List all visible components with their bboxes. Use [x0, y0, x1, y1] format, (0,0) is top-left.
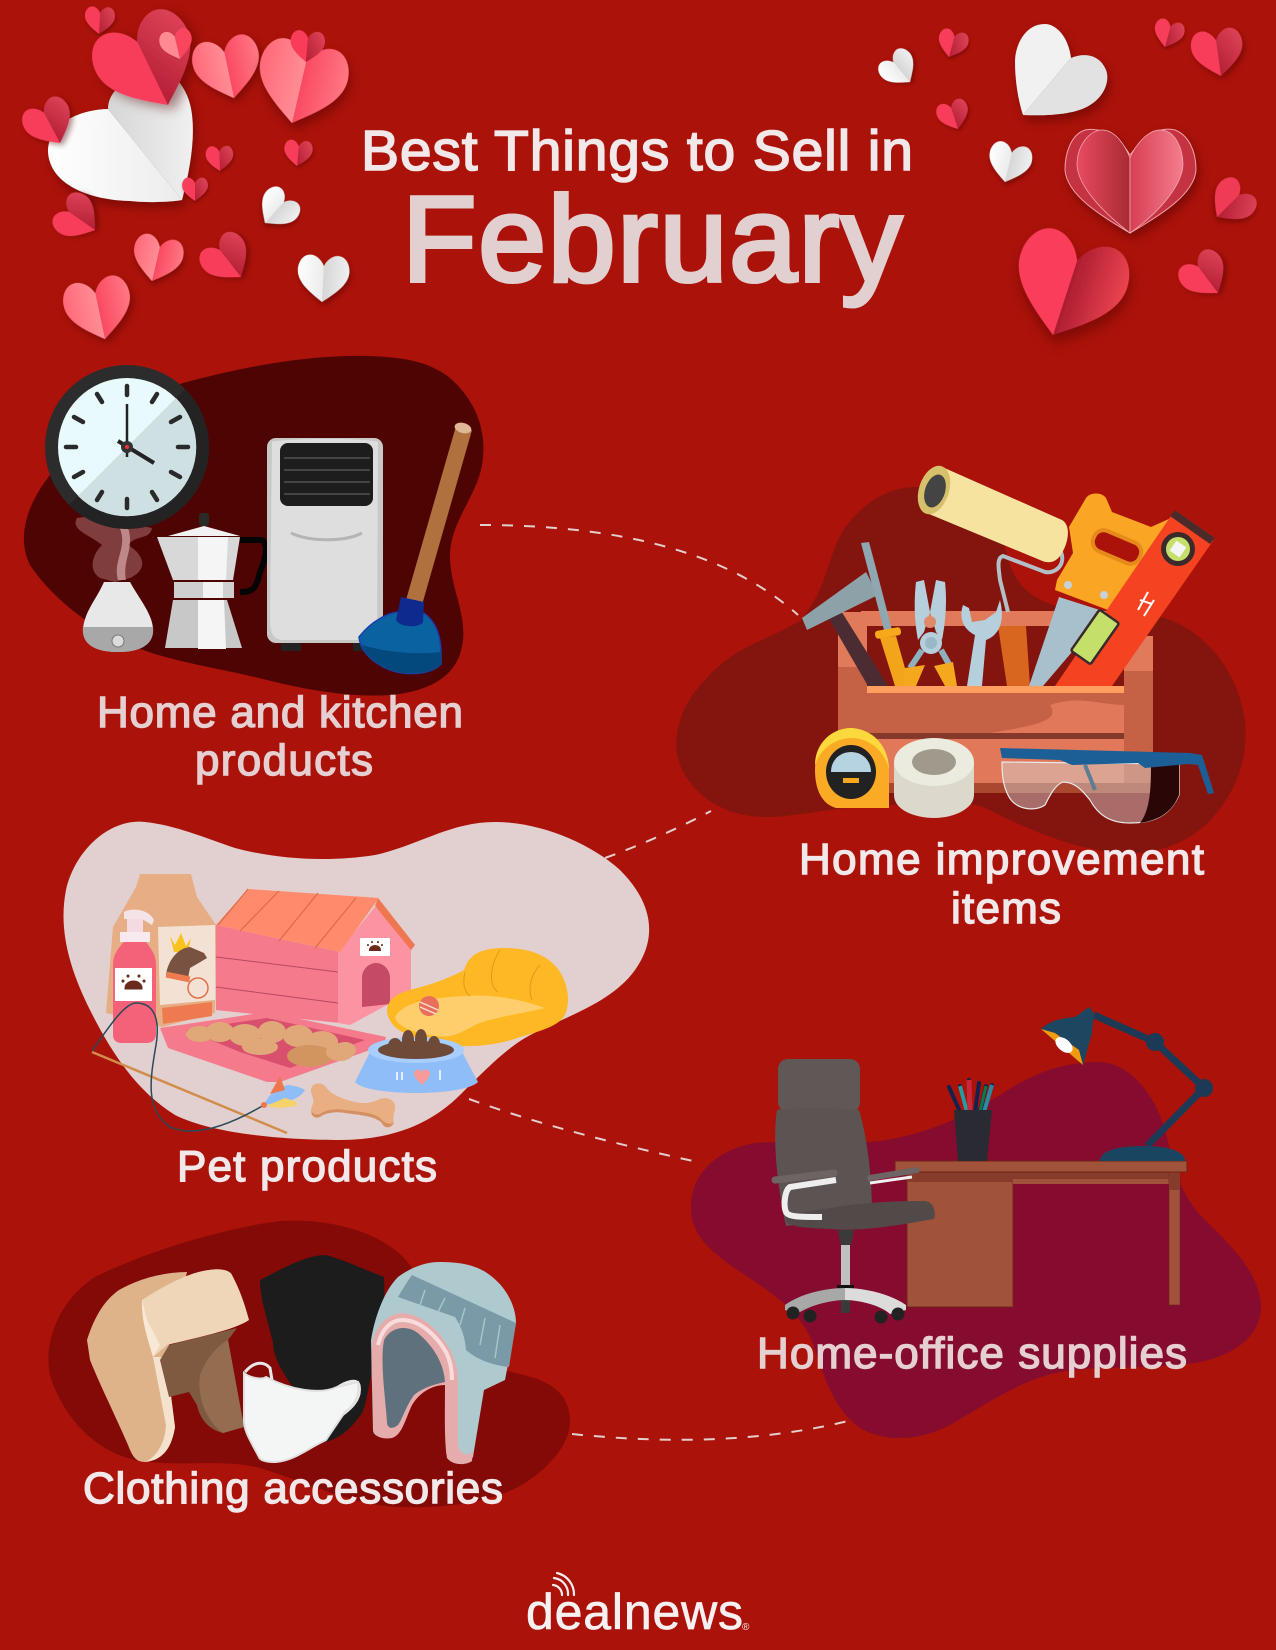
- label: home and kitchen products: products: [195, 736, 373, 785]
- icon: dog food bag: [106, 874, 216, 1027]
- icon: cat wand toy: [92, 1003, 305, 1133]
- wordmark: dealnews: [526, 1584, 743, 1640]
- icon: wooden handle tool: [998, 626, 1030, 686]
- label: home improvement items: Home improvement: [799, 835, 1204, 884]
- blob: [676, 487, 1246, 853]
- icon: pen cup: [949, 1080, 992, 1161]
- blob: [63, 822, 649, 1140]
- label: home improvement items: [799, 835, 1204, 933]
- registered mark: ®: [742, 1622, 750, 1633]
- paper hearts left cluster: [17, 1, 354, 346]
- icon: toolbox back: [838, 611, 1153, 790]
- icon: paint roller: [912, 462, 1068, 612]
- icon: pet bed: [387, 948, 568, 1046]
- logo: dealnews: [526, 1573, 750, 1640]
- icon: desk lamp: [1041, 1007, 1213, 1161]
- icon: diffuser with steam: [76, 515, 153, 652]
- icon: portable air conditioner: [267, 438, 383, 651]
- panel: pet products: [63, 822, 649, 1191]
- panel: home and kitchen: [24, 356, 483, 785]
- icon: dog bone: [311, 1084, 395, 1127]
- dashed connector: pets to office: [469, 1099, 702, 1163]
- icon: safety goggles: [1000, 748, 1214, 823]
- label: pet products: Pet products: [177, 1142, 437, 1191]
- icon: neck gaiter: [260, 1255, 384, 1442]
- icon: signal waves: [553, 1573, 574, 1595]
- panel: clothing accessories: [48, 1221, 570, 1513]
- icon: screwdriver: [861, 542, 910, 686]
- panel: home office: [691, 1007, 1261, 1438]
- paper hearts right cluster: [874, 17, 1261, 352]
- icon: food bowl: [355, 1029, 478, 1093]
- title: [361, 119, 913, 307]
- label: home improvement items: items: [951, 884, 1061, 933]
- icon: office chair: [775, 1059, 935, 1324]
- dashed connector: tools to pets: [605, 811, 711, 858]
- icon: white face mask: [244, 1363, 359, 1462]
- title line: Best Things to Sell in: Best Things to Sell in: [361, 119, 913, 183]
- icon: hand saw: [1029, 494, 1171, 686]
- dashed connector: home to tools: [480, 525, 798, 615]
- panel: home improvement: [676, 462, 1246, 933]
- icon: soap bottle: [113, 910, 156, 1043]
- icon: plunger: [359, 421, 473, 674]
- label: home and kitchen products: Home and kitchen: [97, 688, 463, 737]
- icon: moka pot: [157, 513, 266, 649]
- icon: tape measure: [815, 728, 889, 808]
- icon: knit earflap hat: [371, 1262, 516, 1464]
- icon: hammer: [802, 572, 888, 686]
- label: home and kitchen products: [97, 688, 463, 785]
- icon: wall clock: [45, 365, 209, 529]
- title line: February: February: [402, 171, 902, 307]
- icon: tape roll: [894, 738, 974, 818]
- label: clothing accessories: Clothing accessories: [83, 1464, 503, 1513]
- icon: pliers: [903, 580, 957, 686]
- blob: [48, 1221, 570, 1507]
- icon: desk: [895, 1161, 1187, 1307]
- label: home-office supplies: Home-office supplies: [757, 1329, 1187, 1378]
- icon: dog house: [216, 889, 415, 1025]
- icon: toolbox front boards: [838, 686, 1153, 793]
- blob: [691, 1062, 1261, 1438]
- dashed connector: office to clothing: [572, 1421, 848, 1440]
- icon: trapper hat: [87, 1269, 249, 1462]
- icon: wrench: [961, 600, 1002, 686]
- blob: [24, 356, 483, 696]
- icon: spirit level: [1055, 510, 1215, 686]
- icon: litter tray: [160, 1012, 386, 1082]
